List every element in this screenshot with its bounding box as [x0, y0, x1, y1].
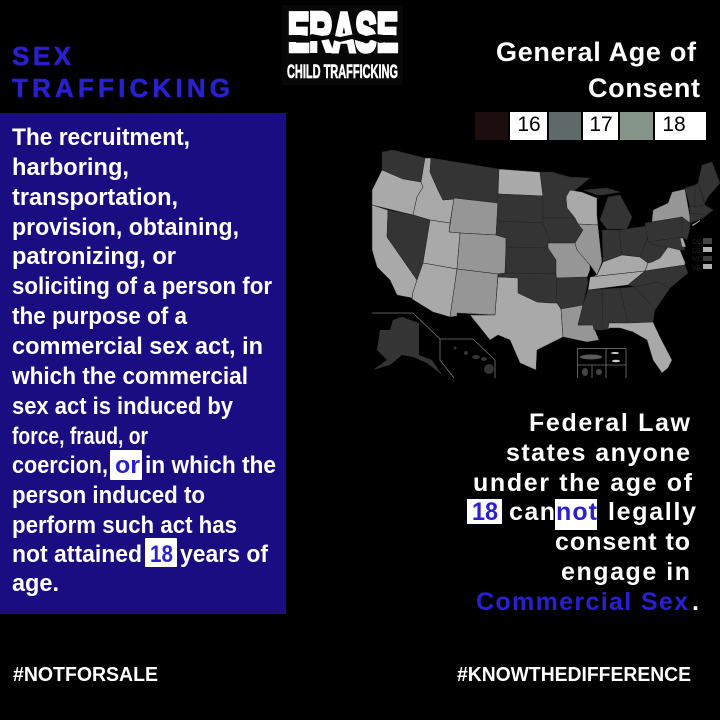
hashtag: not for sale: #NOTFORSALE	[13, 664, 158, 686]
logo: erase child trafficking: ERASE	[288, 1, 398, 63]
text block: federal law: .	[692, 588, 699, 616]
heading: general age of consent	[496, 37, 700, 103]
text block: federal law: not	[556, 498, 598, 526]
map: small state legend	[692, 238, 712, 272]
panel: definition: person induced to	[12, 482, 205, 509]
map: small state legend: MD	[692, 256, 703, 263]
heading: sex trafficking: SEX	[12, 41, 72, 71]
text block: federal law: consent to	[555, 528, 690, 556]
text block: federal law: Federal Law	[529, 409, 691, 437]
map: small state legend: DC	[692, 239, 702, 246]
panel: definition: provision, obtaining,	[12, 214, 239, 241]
hashtag: know the difference: #KNOWTHEDIFFERENCE	[457, 664, 691, 686]
panel: definition: coercion,	[12, 452, 108, 479]
map: alaska inset	[372, 313, 495, 378]
text block: federal law: states anyone	[506, 439, 690, 467]
heading: sex trafficking	[12, 41, 230, 103]
map: small state legend: VA	[692, 265, 701, 272]
mask: map lower crop	[372, 378, 720, 390]
panel: definition: 18	[150, 541, 173, 568]
legend: age of consent: 16	[517, 113, 541, 136]
text block: federal law: 18	[472, 498, 498, 526]
heading: sex trafficking: TRAFFICKING	[12, 73, 230, 103]
panel: definition: the purpose of a	[12, 303, 188, 330]
panel: definition: age.	[12, 570, 59, 597]
map: small state legend: DE	[692, 248, 702, 255]
panel: definition: transportation,	[12, 184, 178, 211]
legend: age of consent: 18	[662, 113, 686, 136]
text block: federal law: legally	[608, 498, 696, 526]
text block: federal law: Commercial Sex	[476, 588, 688, 616]
panel: definition: years of	[180, 541, 269, 568]
panel: definition: The recruitment,	[12, 124, 190, 151]
panel: definition: not attained	[12, 541, 142, 568]
text block: federal law: under the age of	[473, 469, 693, 497]
legend: age of consent	[475, 112, 706, 140]
panel: definition: which the commercial	[11, 363, 248, 390]
panel: definition: in which the	[145, 452, 276, 479]
map: hawaii inset	[454, 346, 494, 374]
map: central states	[470, 169, 599, 370]
panel: definition: soliciting of a person for	[12, 273, 272, 300]
map: united states age of consent	[372, 150, 720, 390]
legend: age of consent: 17	[589, 113, 613, 136]
logo: erase child trafficking: CHILD TRAFFICKING	[287, 62, 398, 83]
panel: definition	[0, 113, 286, 614]
text block: federal law	[467, 409, 699, 616]
heading: general age of consent: General Age of	[496, 37, 697, 67]
panel: definition: sex act is induced by	[12, 393, 234, 420]
logo: erase child trafficking	[282, 1, 403, 85]
heading: general age of consent: Consent	[588, 73, 700, 103]
panel: definition: harboring,	[12, 154, 129, 181]
panel: definition: perform such act has	[12, 512, 237, 539]
panel: definition: commercial sex act, in	[12, 333, 263, 360]
map: territories inset	[577, 348, 626, 382]
panel: definition: or	[115, 452, 140, 479]
map: western states	[372, 150, 506, 317]
text block: federal law: can	[509, 498, 555, 526]
text block: federal law: engage in	[561, 558, 690, 586]
map: northeastern states	[645, 162, 720, 250]
map: great lakes states	[566, 188, 647, 275]
panel: definition: patronizing, or	[12, 243, 176, 270]
panel: definition: force, fraud, or	[12, 423, 148, 450]
map: southern states	[578, 240, 688, 373]
